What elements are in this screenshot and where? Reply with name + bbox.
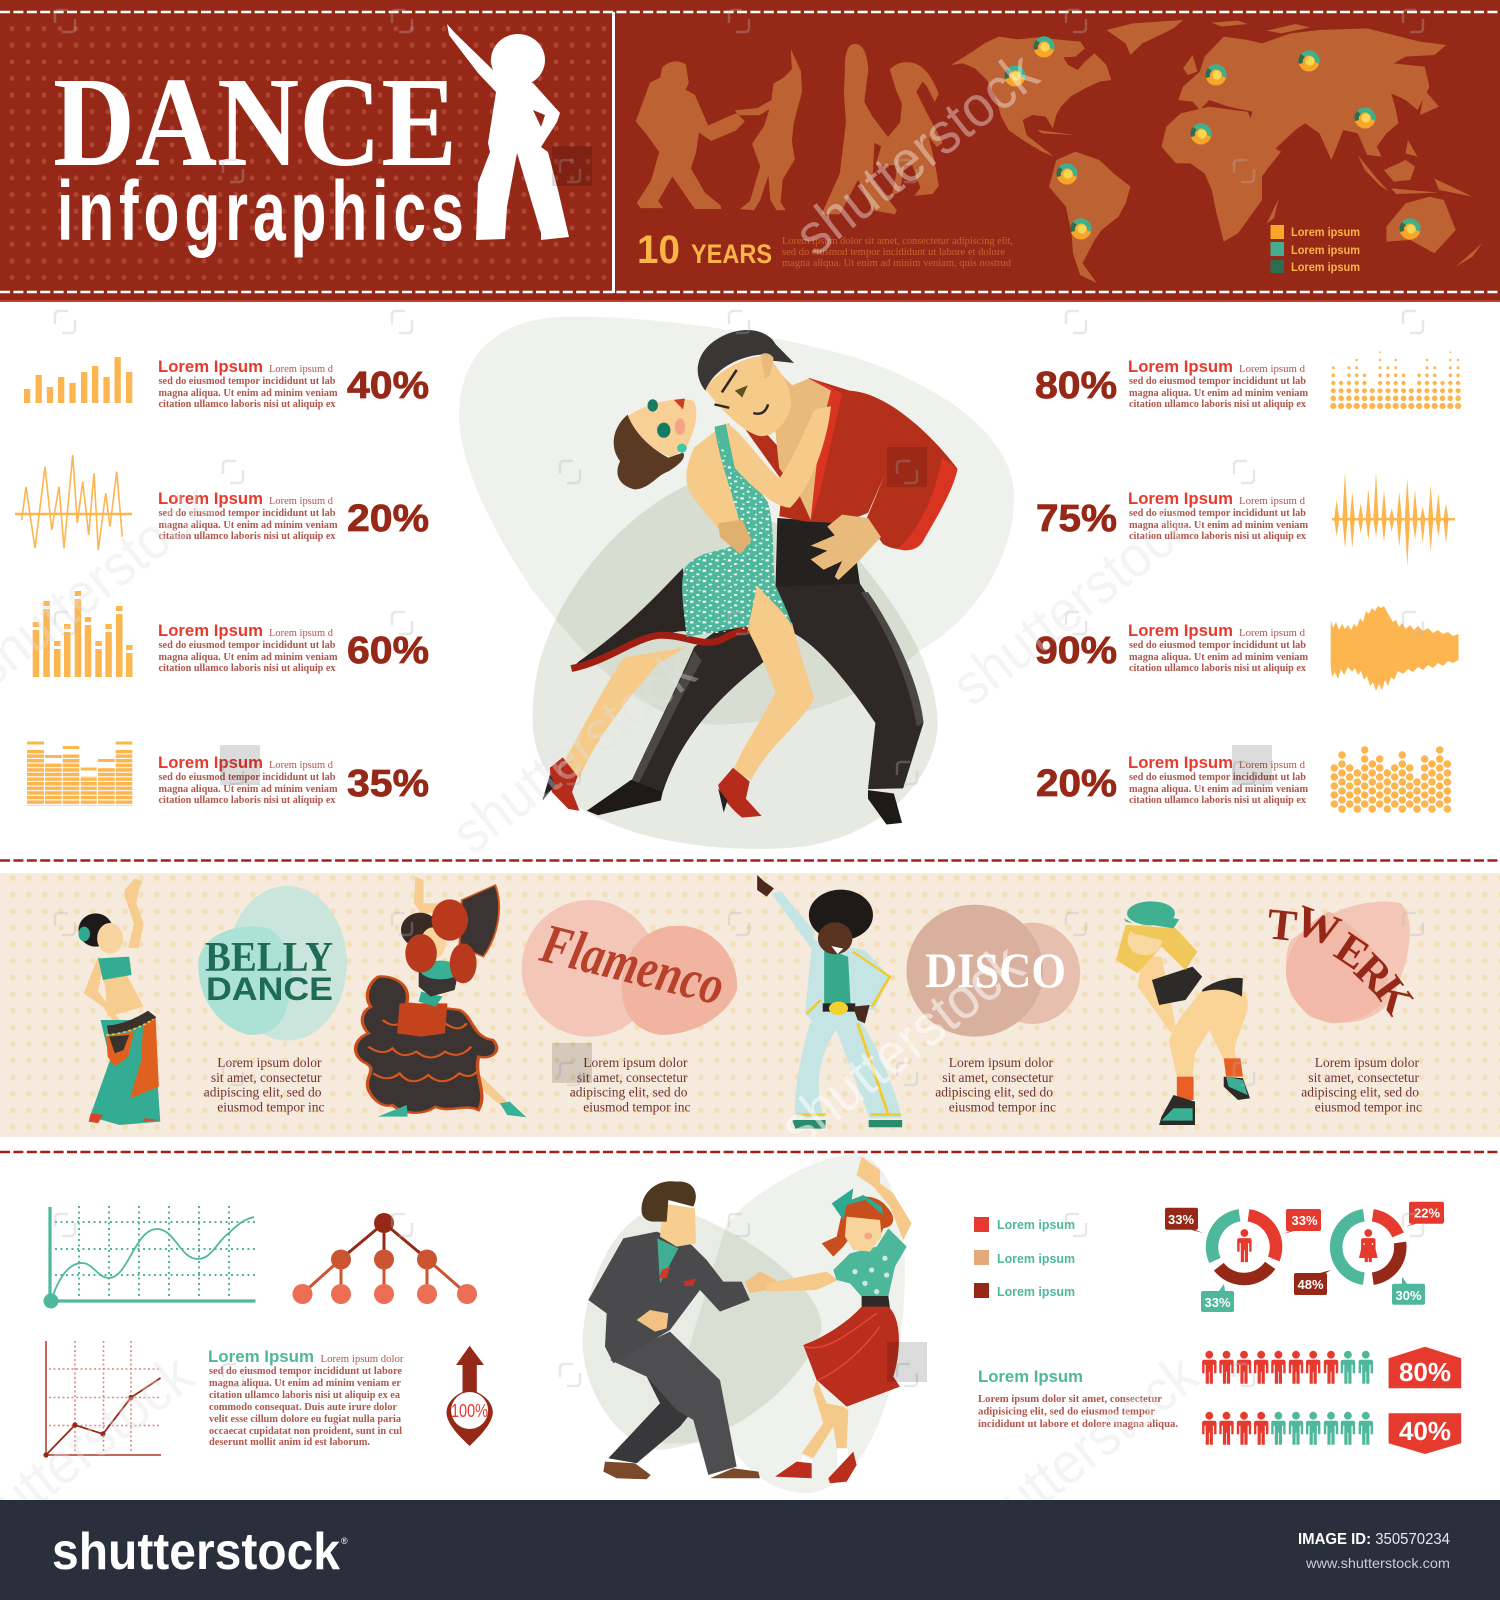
text: lorem ipsum block: Lorem ipsum d [1239,760,1306,771]
callout 48% dark [1294,1270,1331,1295]
label blobs [1286,901,1410,1023]
text block: lorem ipsum paragraph: magna aliqua. Ut enim ad minim veniam er [209,1378,401,1389]
value 40%: 40% [347,365,429,407]
text: lorem ipsum block: Lorem ipsum d [1239,628,1306,639]
chart: teal curve on dotted grid [44,1206,256,1308]
stat row 7 [1035,606,1458,691]
title: DANCE: DANCE [53,51,457,193]
man [587,330,958,825]
head [705,356,791,436]
description: Lorem ipsum dolor [949,1055,1053,1070]
stat row 5 [1035,352,1459,410]
chart: red line on dotted grid [43,1341,161,1458]
chart: spindle waveform [1332,472,1455,567]
shirt and tie [657,1238,678,1283]
text: lorem ipsum block [1128,753,1308,806]
raised arm [857,1157,912,1240]
text block: lorem ipsum paragraph: occaecat cupidatat non proident, sunt in cul [209,1426,402,1437]
text block: lorem ipsum lower right: Lorem ipsum dolor sit amet, consectetur [978,1394,1162,1405]
10 years body text: Lorem ipsum dolor sit amet, consectetur adipiscing elit, [782,236,1013,247]
website: www.shutterstock.com [1305,1555,1450,1571]
label: TWERK: R [1345,944,1403,1002]
chart: tree diagram [292,1213,477,1304]
map legend: Lorem ipsum [1291,245,1360,257]
label: TWERK: K [1364,967,1424,1024]
hair [698,330,794,391]
icon: arrow pin 100% [446,1346,493,1446]
text: lorem ipsum block [158,621,338,674]
text: lorem ipsum block: Lorem Ipsum [1128,621,1233,640]
callout 33% dark: 33% [1168,1212,1194,1227]
shoes [587,780,902,825]
description: Lorem ipsum dolor [583,1055,688,1070]
chart: bars with caps [33,591,133,677]
description [570,1055,691,1114]
description: sit amet, consectetur [1308,1070,1419,1085]
text: lorem ipsum block: Lorem ipsum d [1239,364,1306,375]
text: lorem ipsum block: Lorem Ipsum [158,621,263,640]
text: lorem ipsum block: Lorem Ipsum [158,357,263,376]
text block: lorem ipsum paragraph: Lorem Ipsum [208,1347,314,1366]
label: BELLY DANCE: DANCE [206,971,333,1007]
callout 22% red [1406,1202,1444,1227]
panel: left statistics [15,357,429,806]
dance style: twerk [1116,895,1424,1125]
chart: people row 80% [1202,1347,1461,1388]
map legend [1270,225,1360,274]
figure: flamenco dancer [356,877,526,1117]
registered mark: ® [341,1536,348,1546]
tag 80%: 80% [1399,1357,1451,1387]
text: lorem ipsum block: sed do eiusmod tempor incididunt ut lab [158,508,336,519]
map markers [1004,36,1420,239]
description: sit amet, consectetur [211,1070,322,1085]
chart: people row 40% [1202,1412,1461,1454]
text: lorem ipsum block: Lorem Ipsum [1128,489,1233,508]
text: lorem ipsum block [158,489,338,542]
man's hand on her back [718,520,751,554]
text: lorem ipsum block: citation ullamco laboris nisi ut aliquip ex [158,663,336,674]
legs [802,1380,848,1458]
text: lorem ipsum block: sed do eiusmod tempor incididunt ut lab [158,772,336,783]
callout 30% teal: 30% [1395,1288,1422,1303]
trousers [631,582,923,793]
blouse [833,1228,907,1297]
description [935,1055,1056,1114]
text: lorem ipsum block [1128,489,1308,542]
label: DISCO: DISCO [925,942,1066,998]
footer logo: shutterstock [52,1523,340,1581]
text: lorem ipsum block: magna aliqua. Ut enim ad minim veniam [1129,652,1308,663]
text block: lorem ipsum paragraph [208,1347,404,1448]
chart: dense waveform [1331,606,1458,691]
neck and chest [768,361,831,520]
callout 22% red: 22% [1414,1206,1440,1220]
hair [822,1197,893,1257]
hand on waist [811,515,881,580]
panel: central latin couple illustration [459,317,1014,849]
icon: woman [1359,1229,1378,1262]
section divider [0,859,1500,862]
label: TWERK: W [1289,895,1347,956]
panel: right statistics [1035,352,1459,809]
text: lorem ipsum block: magna aliqua. Ut enim ad minim veniam [158,520,338,531]
text: lorem ipsum block: citation ullamco laboris nisi ut aliquip ex [158,795,336,806]
label: BELLY DANCE: BELLY [205,935,333,981]
chart: female donut [1294,1202,1444,1305]
text: lorem ipsum block [1128,621,1308,674]
text: lorem ipsum block: citation ullamco laboris nisi ut aliquip ex [1129,399,1307,410]
label blobs [522,900,737,1037]
map legend: Lorem ipsum [1291,227,1360,239]
trousers [608,1377,693,1463]
donut arcs [1336,1215,1400,1279]
arm around neck [726,406,831,508]
dance style: disco [757,875,1080,1129]
tag 80% [1389,1347,1461,1388]
value 20%: 20% [347,498,429,540]
panel: dance styles band [0,873,1500,1137]
woman [542,399,831,818]
pictogram row [1202,1351,1373,1384]
text: lorem ipsum block: citation ullamco laboris nisi ut aliquip ex [158,399,336,410]
description: Lorem ipsum dolor [217,1055,322,1070]
text: lorem ipsum block: sed do eiusmod tempor incididunt ut lab [158,640,336,651]
text: lorem ipsum block [1128,357,1308,410]
stat row 8 [1036,741,1447,809]
text: lorem ipsum block: sed do eiusmod tempor incididunt ut lab [1129,508,1306,519]
icon: arrow pin 100%: 100% [451,1401,488,1421]
text: lorem ipsum block: citation ullamco laboris nisi ut aliquip ex [1129,531,1307,542]
description: adipiscing elit, sed do [204,1084,322,1100]
woman [767,1157,912,1483]
watermark overlay: shutterstock [940,489,1208,718]
head [660,1203,696,1247]
description: Lorem ipsum dolor [1315,1055,1419,1070]
callout 48% dark: 48% [1297,1277,1324,1292]
10 years heading: 10 [637,228,680,272]
value 20%: 20% [1036,763,1117,805]
text: lorem ipsum block [158,357,338,410]
text: lorem ipsum block: Lorem Ipsum [158,489,263,508]
label: Flamenco: Flamenco [534,912,730,1018]
description: adipiscing elit, sed do [570,1084,688,1100]
text: lorem ipsum block: magna aliqua. Ut enim ad minim veniam [158,652,338,663]
10 years body text [782,236,1013,269]
text: lorem ipsum block: sed do eiusmod tempor incididunt ut lab [158,376,336,387]
text: lorem ipsum block [158,753,338,806]
callout 33% teal: 33% [1204,1295,1231,1310]
hair [614,415,684,489]
front leg [733,589,814,780]
callout 33% dark [1165,1208,1203,1233]
10 years body text: magna aliqua. Ut enim ad minim veniam, quis nostrud [782,258,1012,269]
value 80%: 80% [1035,365,1117,407]
text: lorem ipsum block: Lorem ipsum d [269,364,334,375]
description [1301,1055,1422,1114]
skirt [803,1307,900,1407]
black under-skirt [572,568,687,668]
dress [682,423,792,637]
icon: disco dancer silhouette [447,24,569,240]
label: TWERK [1265,895,1424,1024]
watermark overlay: shutterstock [783,39,1051,268]
panel: swing couple illustration [583,1154,912,1493]
watermark overlay: shutterstock [768,931,1036,1160]
text: lorem ipsum block: magna aliqua. Ut enim ad minim veniam [1129,520,1308,531]
image id: IMAGE ID: 350570234 [1298,1531,1450,1548]
label: TWERK: E [1326,923,1378,980]
callout 33% red: 33% [1291,1213,1318,1228]
label blobs [906,905,1080,1037]
callout 30% teal [1392,1277,1425,1305]
stat row 4 [27,742,429,806]
footer bar [0,1500,1500,1600]
10 years heading: YEARS [691,239,772,269]
description: eiusmod tempor inc [583,1100,691,1114]
hands [637,1272,777,1332]
header divider [612,12,615,293]
dance style: flamenco [356,877,737,1117]
chart: striped equalizer [27,742,132,806]
chart: bars [24,357,132,403]
value 60%: 60% [347,630,429,672]
band dot pattern [0,873,1500,1137]
text: lorem ipsum block: Lorem Ipsum [1128,357,1233,376]
description: eiusmod tempor inc [217,1100,325,1114]
face features [714,370,768,414]
text block: lorem ipsum paragraph: sed do eiusmod tempor incididunt ut labore [209,1366,402,1377]
tag 40% [1389,1413,1461,1454]
text: lorem ipsum block: sed do eiusmod tempor incididunt ut lab [1129,640,1306,651]
silhouettes of dancing couples [636,44,943,214]
stat row 3 [33,591,429,677]
label: BELLY DANCE [205,935,333,1007]
text: lorem ipsum block: Lorem ipsum d [1239,496,1306,507]
10 years body text: sed do eiusmod tempor incididunt ut labore et dolore [782,247,1005,258]
header dot pattern [0,16,608,286]
header right panel: dancers and world map [636,20,1482,283]
background blobs [583,1154,905,1493]
chart: dot equalizer [1333,352,1459,406]
text: lorem ipsum block: Lorem Ipsum [158,753,263,772]
text: lorem ipsum block: citation ullamco laboris nisi ut aliquip ex [1129,795,1307,806]
figure: belly dancer [78,878,160,1125]
donut arcs [1212,1215,1276,1279]
figure: disco man [757,875,902,1129]
text block: lorem ipsum paragraph: velit esse cillum dolore eu fugiat nulla paria [209,1414,402,1425]
callout 33% teal [1201,1284,1234,1312]
stat row 1 [24,357,429,410]
shoes [603,1462,760,1479]
belt [862,1296,890,1308]
icon: man [1237,1229,1252,1262]
tag 40%: 40% [1399,1416,1451,1446]
watermark overlay: shutterstock [943,1341,1211,1570]
hair [642,1181,696,1222]
text: lorem ipsum block: sed do eiusmod tempor incididunt ut lab [1129,376,1306,387]
text block: lorem ipsum lower right: adipisicing elit, sed do eiusmod tempor [978,1406,1155,1418]
text: lorem ipsum block: citation ullamco laboris nisi ut aliquip ex [1129,663,1307,674]
shirt [746,378,958,549]
text: lorem ipsum block: Lorem ipsum d [269,496,334,507]
map legend: Lorem ipsum [1291,262,1360,274]
figure: twerk dancer [1116,901,1250,1125]
description: eiusmod tempor inc [1315,1100,1422,1114]
text block: lorem ipsum lower right [978,1367,1178,1430]
header background [0,0,1500,302]
header left panel: title [53,24,569,259]
value 35%: 35% [347,763,429,805]
legend: three colours [974,1217,1075,1299]
chart: zigzag line [15,455,132,550]
value 75%: 75% [1036,498,1117,540]
shoes [550,757,761,818]
ear and sideburn [761,353,774,379]
text block: lorem ipsum paragraph: citation ullamco laboris nisi ut aliquip ex ea [209,1390,401,1401]
description: sit amet, consectetur [577,1070,688,1085]
description [204,1055,325,1114]
value 90%: 90% [1035,630,1117,672]
text block: lorem ipsum lower right: Lorem Ipsum [978,1367,1083,1386]
socks and shoes [800,1448,848,1473]
description: adipiscing elit, sed do [1301,1084,1419,1100]
hair bow [832,1188,883,1220]
text: lorem ipsum block: Lorem Ipsum [1128,753,1233,772]
text: lorem ipsum block: magna aliqua. Ut enim ad minim veniam [1129,388,1308,399]
text: lorem ipsum block: Lorem ipsum d [269,628,334,639]
text: lorem ipsum block: sed do eiusmod tempor incididunt ut lab [1129,772,1306,783]
text: lorem ipsum block: magna aliqua. Ut enim ad minim veniam [158,784,338,795]
sash [776,518,860,587]
chart: honeycomb equalizer [1334,741,1447,809]
stat row 2 [15,455,429,550]
face [628,399,696,458]
description: sit amet, consectetur [942,1070,1053,1085]
label: TWERK: T [1265,899,1299,951]
skirt trim [571,630,750,669]
title: infographics: infographics [57,165,469,259]
back leg [565,647,687,778]
text: lorem ipsum block: Lorem ipsum d [269,760,334,771]
pictogram row [1202,1412,1373,1445]
text block: lorem ipsum paragraph: Lorem ipsum dolor [320,1354,404,1365]
chart: male donut [1165,1208,1321,1312]
back and torso [686,423,757,554]
background blobs [459,317,1014,849]
description: adipiscing elit, sed do [935,1084,1053,1100]
text block: lorem ipsum paragraph: commodo consequat. Duis aute irure dolor [209,1402,397,1413]
text block: lorem ipsum paragraph: deserunt mollit anim id est laborum. [209,1437,370,1448]
label blobs [198,886,347,1041]
text block: lorem ipsum lower right: incididunt ut labore et dolore magna aliqua. [978,1419,1178,1430]
section divider [0,1151,1500,1153]
watermark overlay: shutterstock [440,637,708,866]
stat row 6 [1036,472,1455,567]
text: lorem ipsum block: magna aliqua. Ut enim ad minim veniam [1129,784,1308,795]
10 years heading [637,228,772,272]
world map [951,20,1482,283]
face [845,1217,882,1252]
text: lorem ipsum block: magna aliqua. Ut enim ad minim veniam [158,388,338,399]
legend: three colours: Lorem ipsum [997,1217,1075,1232]
legend: three colours: Lorem ipsum [997,1251,1075,1266]
legend: three colours: Lorem ipsum [997,1284,1075,1299]
man [588,1181,777,1479]
arm [767,1272,838,1292]
dress slit [748,585,792,644]
face details [648,399,687,453]
jacket [588,1232,750,1363]
text: lorem ipsum block: citation ullamco laboris nisi ut aliquip ex [158,531,336,542]
dance style: belly dance [78,878,347,1125]
description: eiusmod tempor inc [949,1100,1056,1114]
callout 33% red [1283,1209,1321,1234]
